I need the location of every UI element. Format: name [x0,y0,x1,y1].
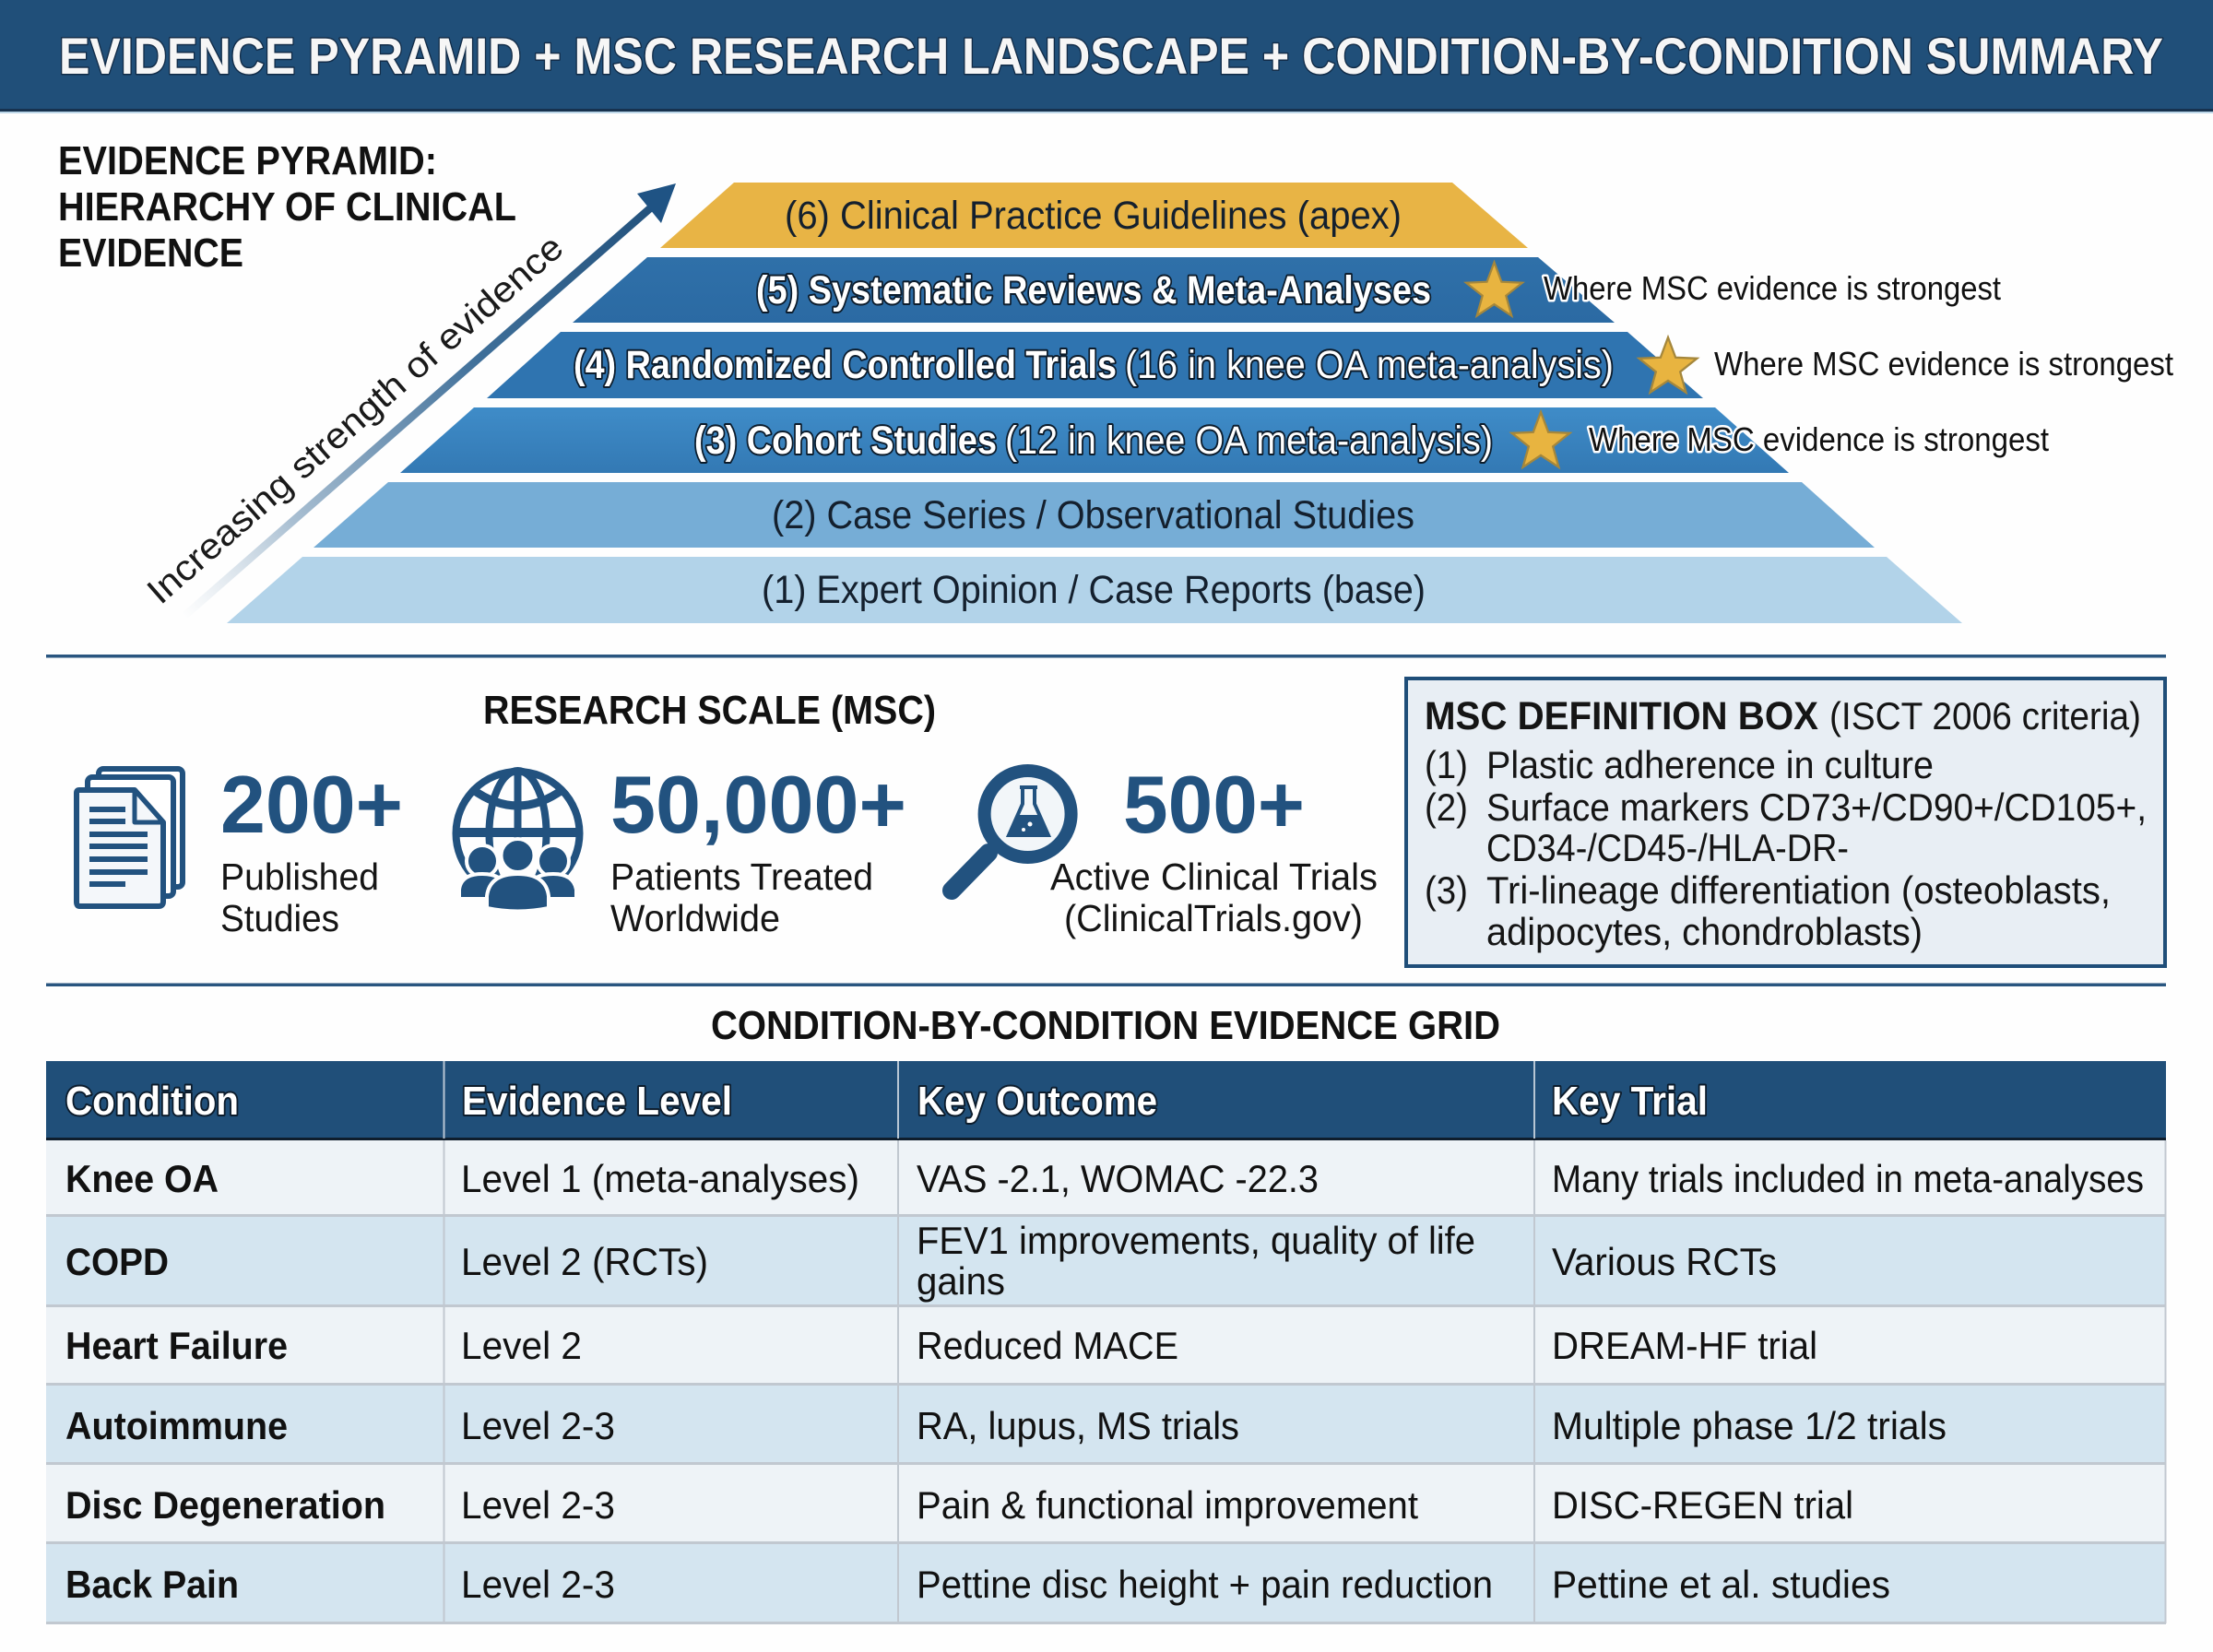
icon: globe with people [456,771,580,911]
row: Heart Failure: Reduced MACE [917,1324,1178,1367]
stat: published studies: 200+ [220,759,403,850]
criterion 3: (3) [1425,868,1468,912]
row: Knee OA: Level 1 (meta-analyses) [461,1157,859,1200]
callout: tier 4: Where MSC evidence is strongest [1714,345,2173,383]
row: Heart Failure [46,1305,2166,1384]
row: Heart Failure: DREAM-HF trial [1552,1324,1817,1367]
panel: MSC definition box [1406,678,2165,966]
icon: stacked documents [77,769,183,906]
row: Disc Degeneration: Disc Degeneration [65,1483,385,1527]
row: COPD: COPD [65,1240,169,1283]
row: Disc Degeneration: Level 2-3 [461,1483,615,1527]
header banner [0,0,2213,113]
tier 5: systematic reviews: (5) Systematic Reviews & Meta-Analyses [756,268,1431,313]
stat: active clinical trials: 500+ [1123,759,1305,850]
table header: Key Outcome [917,1079,1157,1124]
row: Back Pain: Pettine et al. studies [1552,1563,1890,1606]
criterion 2: CD34-/CD45-/HLA-DR- [1486,826,1849,869]
tier 2: case series: (2) Case Series / Observational Studies [772,493,1414,537]
tier 3: cohort studies: (12 in knee OA meta-analysis) [1005,419,1493,463]
criterion 1: Plastic adherence in culture [1486,743,1934,786]
row: Knee OA [46,1140,2166,1215]
tier 3: cohort studies: (3) Cohort Studies [694,419,997,463]
tier 4: randomized controlled trials: (16 in knee OA meta-analysis) [1125,343,1614,387]
stat: patients treated [610,759,906,939]
row: COPD: FEV1 improvements, quality of life [917,1219,1475,1262]
heading: evidence pyramid: HIERARCHY OF CLINICAL [58,184,516,230]
row: COPD: gains [917,1259,1005,1303]
row: Disc Degeneration [46,1463,2166,1542]
criterion 3: adipocytes, chondroblasts) [1486,910,1923,953]
heading: condition grid: CONDITION-BY-CONDITION EVIDENCE GRID [711,1003,1500,1048]
tier 1: expert opinion: (1) Expert Opinion / Case Reports (base) [762,568,1426,612]
row: Knee OA: VAS -2.1, WOMAC -22.3 [917,1157,1319,1200]
panel: research scale [77,688,1378,939]
criterion 3: Tri-lineage differentiation (osteoblasts, [1486,868,2111,912]
table: condition-by-condition evidence grid [46,1061,2167,1624]
row: Autoimmune: Autoimmune [65,1404,288,1447]
heading: evidence pyramid: EVIDENCE PYRAMID: [58,138,437,183]
row: Heart Failure: Heart Failure [65,1324,288,1367]
tier 6: guidelines [660,183,1528,248]
icon: star on tier 4 [1639,337,1697,393]
row: Back Pain: Pettine disc height + pain reduction [917,1563,1493,1606]
stat: patients treated: Worldwide [610,897,780,939]
tier 1: expert opinion [227,557,1962,623]
row: Knee OA: Knee OA [65,1157,219,1200]
stat: active clinical trials [1050,759,1378,939]
icon: star on tier 3 [1512,412,1569,467]
definition heading: MSC DEFINITION BOX [1425,694,1818,738]
stat: patients treated: Patients Treated [610,856,873,898]
icon: magnifier with flask [952,771,1071,891]
stat: published studies [220,759,403,939]
row: Disc Degeneration: Pain & functional improvement [917,1483,1418,1527]
row: Autoimmune [46,1384,2166,1463]
row: Back Pain: Level 2-3 [461,1563,615,1606]
tier 4: randomized controlled trials [487,332,1703,398]
row: Knee OA: Many trials included in meta-analyses [1552,1157,2144,1200]
stat: published studies: Published [220,856,379,898]
callout: tier 5: Where MSC evidence is strongest [1544,269,2001,307]
evidence pyramid [227,183,1962,623]
callout: tier 3: Where MSC evidence is strongest [1589,420,2049,458]
row: Autoimmune: Multiple phase 1/2 trials [1552,1404,1947,1447]
definition heading [1425,694,2141,738]
criterion 2 [1425,785,2147,869]
icon: star on tier 5 [1466,263,1522,315]
table header: Key Trial [1552,1079,1708,1124]
heading: evidence pyramid [58,138,516,276]
tier 2: case series [314,482,1875,548]
row: Heart Failure: Level 2 [461,1324,582,1367]
row: COPD: Level 2 (RCTs) [461,1240,708,1283]
tier 4: randomized controlled trials: (4) Randomized Controlled Trials [574,343,1117,387]
criterion 2: (2) [1425,785,1468,829]
stat: patients treated: 50,000+ [610,759,906,850]
row: Autoimmune: Level 2-3 [461,1404,615,1447]
row: Autoimmune: RA, lupus, MS trials [917,1404,1239,1447]
row: Back Pain: Back Pain [65,1563,239,1606]
row: COPD [46,1215,2166,1305]
tier 5: systematic reviews [573,257,1615,323]
stat: active clinical trials: (ClinicalTrials.gov) [1064,897,1363,939]
stat: active clinical trials: Active Clinical Trials [1050,856,1378,898]
tier 6: guidelines: (6) Clinical Practice Guidelines (apex) [785,194,1402,238]
arrow: increasing strength of evidence [181,183,676,620]
criterion 3 [1425,868,2111,953]
heading: research scale: RESEARCH SCALE (MSC) [483,688,936,733]
row: Disc Degeneration: DISC-REGEN trial [1552,1483,1853,1527]
criterion 1: (1) [1425,743,1468,786]
row: COPD: Various RCTs [1552,1240,1777,1283]
definition heading: (ISCT 2006 criteria) [1829,694,2141,738]
table header: Condition [65,1079,239,1124]
criterion 2: Surface markers CD73+/CD90+/CD105+, [1486,785,2147,829]
table header [46,1061,2166,1140]
arrow label: Increasing strength of evidence [140,228,571,612]
row: Back Pain [46,1542,2166,1622]
tier 3: cohort studies [400,407,1789,473]
stat: published studies: Studies [220,897,339,939]
heading: evidence pyramid: EVIDENCE [58,230,243,276]
table header: Evidence Level [462,1079,732,1124]
